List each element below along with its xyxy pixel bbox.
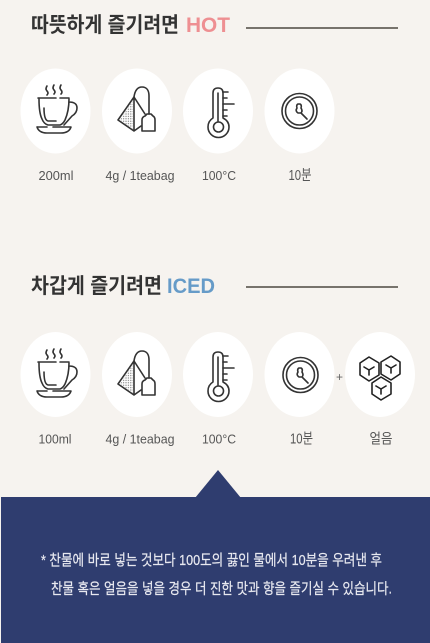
panel: note <box>1 470 430 643</box>
panel: hot <box>20 14 398 184</box>
heading: iced: 차갑게 즐기려면 <box>31 275 162 298</box>
item: ice 얼음: 얼음 <box>370 430 393 446</box>
item: ice 얼음 <box>345 332 415 446</box>
item: timer 10분: 10분 <box>288 168 312 184</box>
item: cup 200ml <box>20 68 90 183</box>
heading: hot: HOT <box>186 14 230 37</box>
note text <box>41 552 392 598</box>
plus sign: + <box>336 370 343 384</box>
item: timer 10분 <box>264 332 334 448</box>
item: teabag 4g <box>102 332 174 446</box>
item: teabag 4g: 4g / 1teabag <box>106 168 174 183</box>
item: cup 100ml: 100ml <box>38 432 72 446</box>
item: teabag 4g: 4g / 1teabag <box>106 432 174 446</box>
arrow: pointer triangle <box>195 470 241 498</box>
item: timer 10분 <box>264 68 334 184</box>
item: cup 200ml: 200ml <box>38 168 74 183</box>
item: thermometer 100°C <box>183 332 253 446</box>
item: cup 100ml <box>20 332 90 446</box>
item: thermometer 100°C: 100°C <box>202 168 236 183</box>
item: timer 10분: 10분 <box>290 432 313 448</box>
heading: iced: ICED <box>167 275 215 298</box>
item: thermometer 100°C <box>183 68 253 183</box>
heading: hot: 따뜻하게 즐기려면 <box>31 14 179 37</box>
panel: iced <box>20 275 415 448</box>
item: teabag 4g <box>102 68 174 183</box>
item: thermometer 100°C: 100°C <box>202 432 236 446</box>
